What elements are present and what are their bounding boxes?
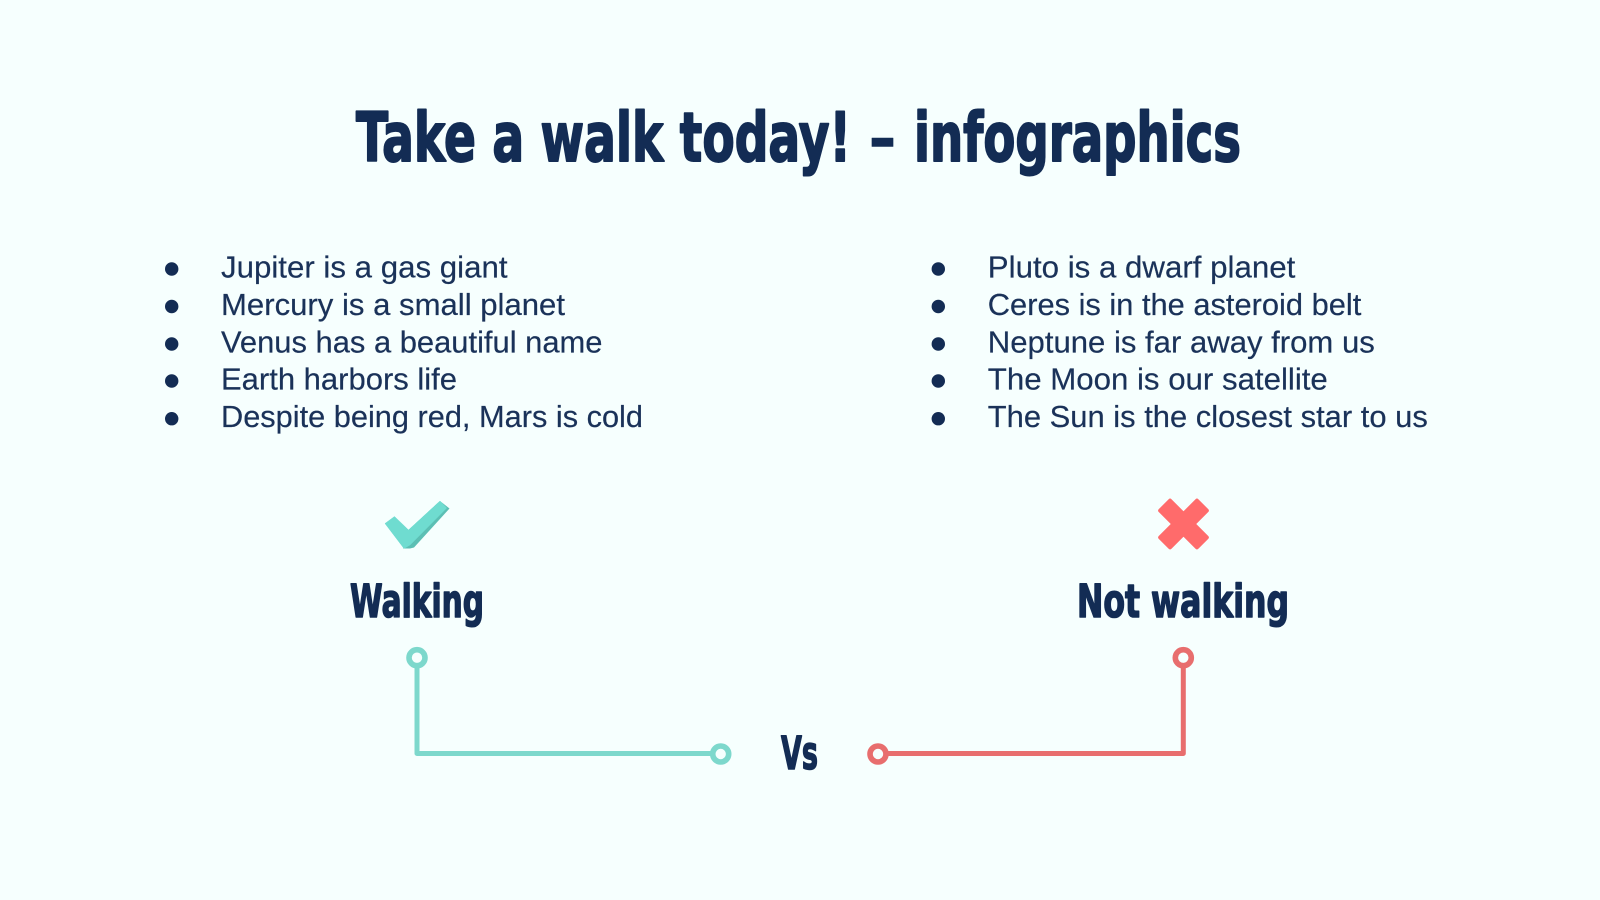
connector: not walking to Vs (870, 650, 1191, 762)
text block: not walking list: Pluto is a dwarf planet (988, 251, 1296, 285)
text block: not walking list: The Moon is our satellite (988, 363, 1328, 397)
text block: walking list: Mercury is a small planet (221, 288, 566, 322)
text block: not walking list: Ceres is in the asteroid belt (988, 288, 1362, 322)
text block: not walking list (988, 251, 1428, 434)
text block: not walking list: Neptune is far away from us (988, 325, 1375, 359)
title: – (869, 99, 896, 178)
text block: walking list (221, 251, 643, 434)
text block: walking list: Venus has a beautiful name (221, 325, 602, 359)
text block: walking list: Jupiter is a gas giant (221, 251, 508, 285)
icon: cross mark (1157, 498, 1210, 550)
heading: Walking: Walking (350, 575, 484, 628)
label: Vs: Vs (781, 727, 818, 780)
bullets: not walking list (932, 262, 945, 425)
text block: walking list: Despite being red, Mars is cold (221, 400, 643, 434)
panel: walking facts list (165, 251, 643, 434)
bullets: walking list (165, 262, 178, 425)
heading: Not walking: Not walking (1077, 575, 1289, 628)
panel: not walking facts list (932, 251, 1428, 434)
title: infographics (914, 99, 1241, 178)
connector: walking to Vs (409, 650, 729, 762)
title: Take a walk today! (356, 99, 851, 178)
text block: not walking list: The Sun is the closest star to us (988, 400, 1428, 434)
text block: walking list: Earth harbors life (221, 363, 457, 397)
icon: check mark (385, 501, 450, 548)
